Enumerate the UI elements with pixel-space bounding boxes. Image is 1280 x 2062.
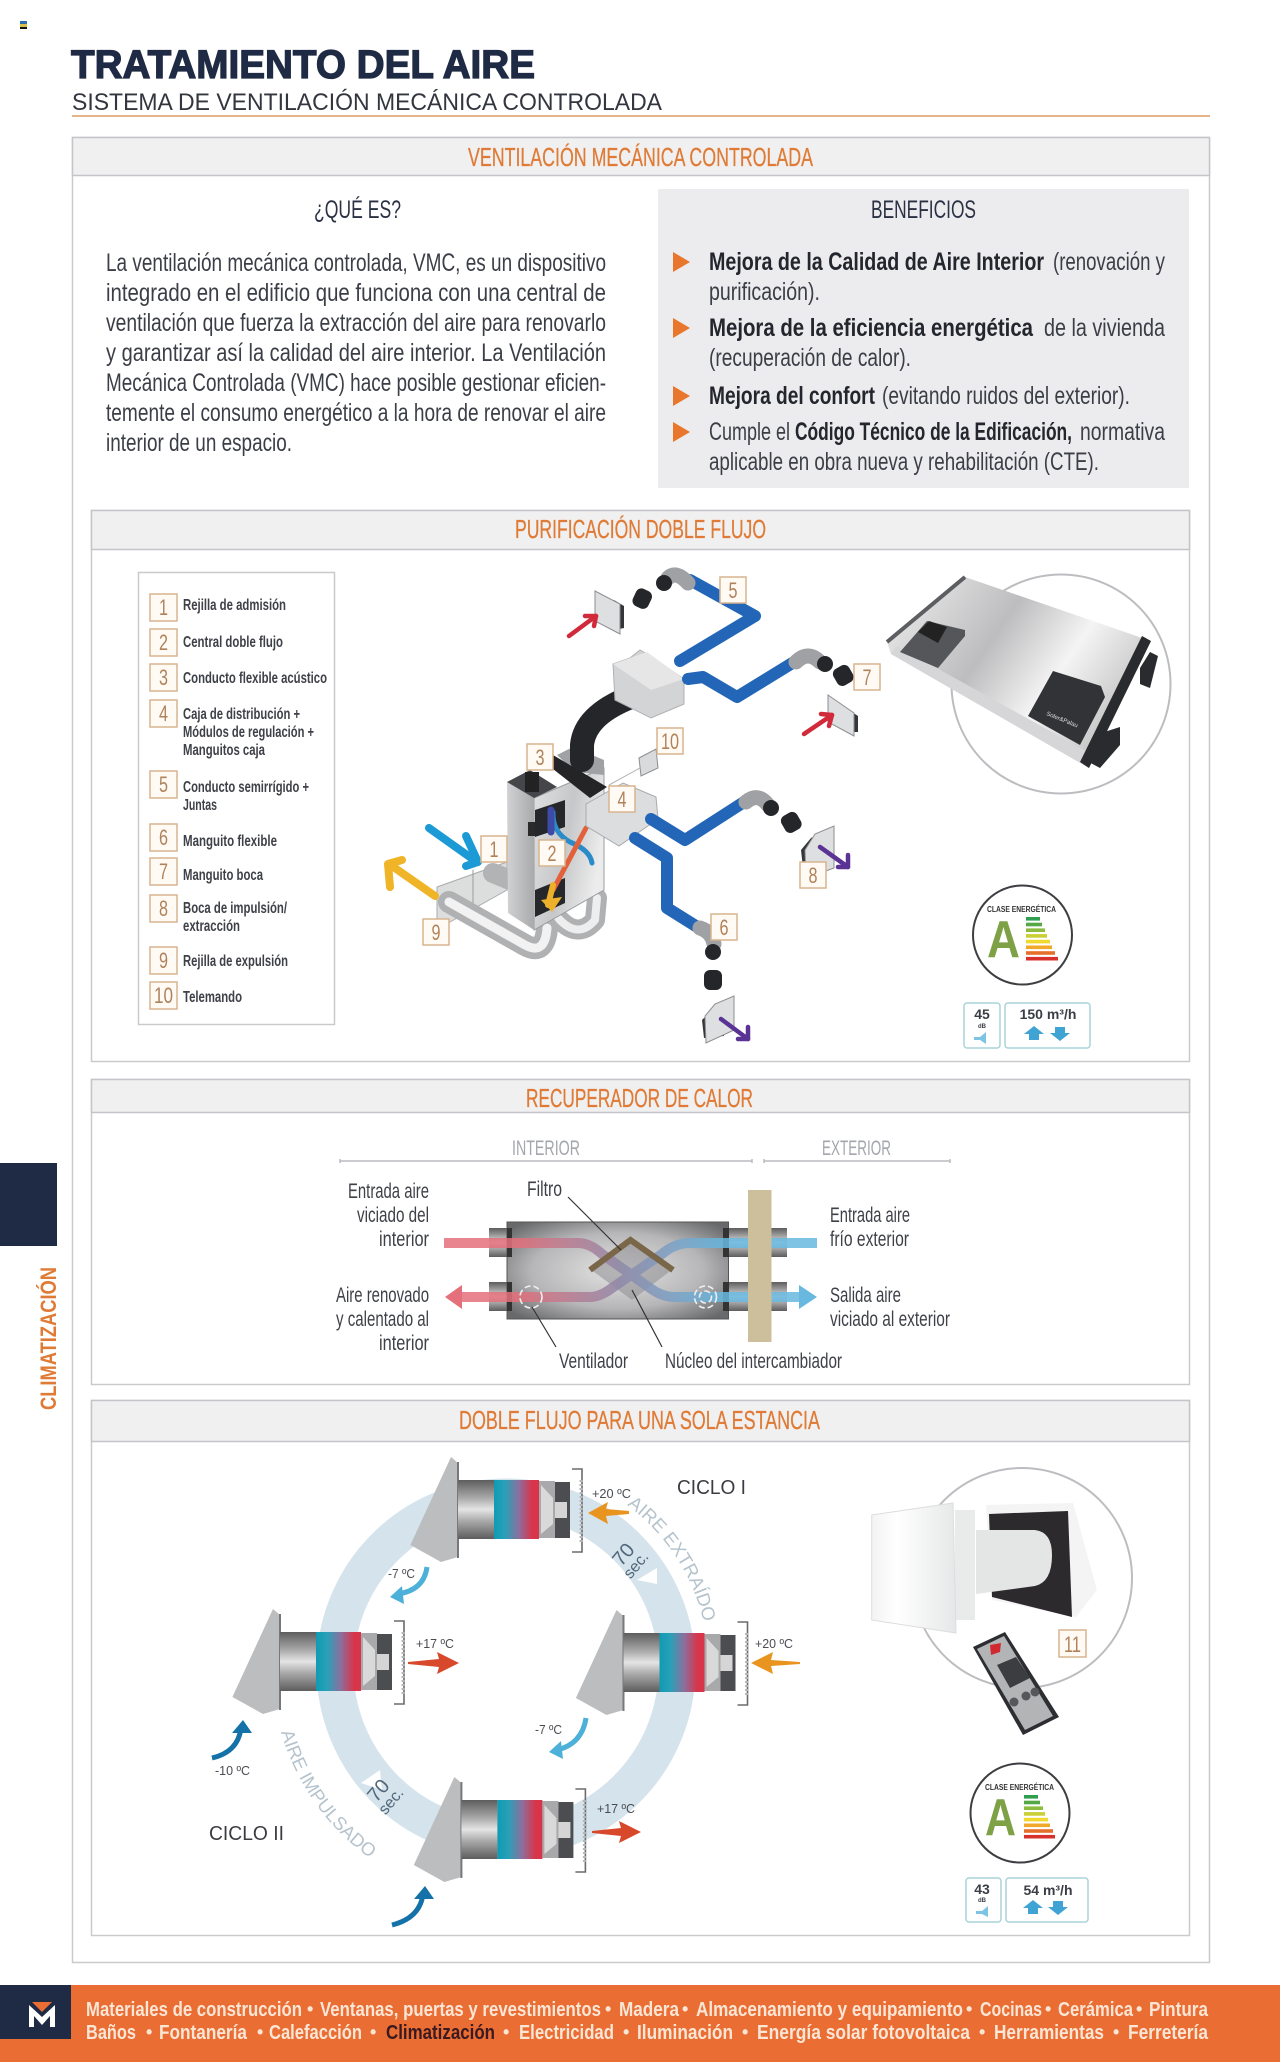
wall [748,1190,772,1342]
footer band [0,1985,1280,2062]
sidebar tab [0,1163,57,1246]
sidebar label: CLIMATIZACIÓN [36,1267,61,1410]
legend item 3: Conducto flexible acústico [183,670,327,687]
footer categories line 1: Madera [619,1999,680,2021]
legend item 2: Central doble flujo [183,634,283,651]
legend item 2 [150,629,283,656]
legend item 7: Manguito boca [183,867,263,884]
panel: beneficios: Mejora del confort [709,382,876,410]
silver exhaust pipes [437,862,597,948]
temperature labels: +20 ºC [592,1486,631,1501]
footer categories line 2: Energía solar fotovoltaica [757,2022,971,2044]
footer categories line 1: • [966,1999,972,2019]
legend item 6: 6 [159,825,168,850]
temperature labels: -7 ºC [535,1722,562,1737]
legend item 9: 9 [159,948,168,973]
marker 6: 6 [720,915,728,940]
label: entrada aire viciado: interior [379,1228,429,1251]
energy class badge: CLASE ENERGÉTICA [985,1783,1054,1792]
temperature labels: -10 ºC [215,1763,250,1778]
heat recovery diagram [336,1137,950,1373]
label: entrada aire viciado [348,1180,429,1251]
stat: noise 45 dB: 45 [974,1006,990,1022]
legend item 2: 2 [159,630,168,655]
marker 6 [711,914,737,940]
air arrows [388,616,848,1039]
legend item 8 [150,895,287,935]
black flexible duct [582,697,631,760]
internal airflow in central unit [548,810,592,905]
footer logo [0,1985,71,2039]
footer categories line 2: • [623,2022,629,2042]
footer categories line 2: • [146,2022,152,2042]
marker 8 [800,862,826,888]
legend item 6: Manguito flexible [183,833,277,850]
legend item 1: 1 [159,595,168,620]
energy class badge: CLASE ENERGÉTICA [987,905,1056,914]
stat: noise 43 dB: 43 [974,1881,990,1897]
label: aire renovado [336,1284,429,1355]
zone label: exterior: EXTERIOR [822,1137,891,1160]
stat: noise 43 dB [966,1878,1001,1922]
legend item 9: Rejilla de expulsión [183,953,288,970]
marker 3 [527,744,553,770]
text block: definition: y garantizar así la calidad del aire interior. La Ventilación [106,339,606,367]
footer categories line 2: Iluminación [637,2022,733,2044]
label: salida aire viciado: Salida aire [830,1284,901,1307]
text block: definition: interior de un espacio. [106,429,292,457]
legend item 4 [150,700,314,759]
footer categories line 2: • [503,2022,509,2042]
footer categories line 2: Electricidad [519,2022,614,2044]
label: aire renovado: Aire renovado [336,1284,429,1307]
marker 10: 10 [661,729,679,754]
panel: beneficios [658,189,1189,488]
temperature labels: +17 ºC [597,1801,635,1816]
panel: beneficios: (evitando ruidos del exterior). [882,382,1130,410]
footer categories line 2: • [1113,2022,1119,2042]
legend item 7: 7 [159,859,168,884]
legend item 5: Juntas [183,797,217,814]
cycle diagram [209,1457,800,1928]
energy class badge: A [985,1789,1016,1847]
footer categories line 1: Cerámica [1058,1999,1134,2021]
panel: beneficios: de la vivienda [1044,314,1165,342]
legend item 6 [150,824,277,851]
label: ciclo I: CICLO I [677,1477,746,1499]
footer categories line 1: Cocinas [980,1999,1042,2021]
arrow: warm out bottom [592,1821,641,1843]
callout: single room unit product [872,1468,1132,1735]
legend item 8: Boca de impulsión/ [183,900,287,917]
arrow: warm out left [408,1652,459,1674]
footer categories line 2: Fontanería [159,2022,248,2044]
print colour marker [20,21,27,29]
legend item 5: 5 [159,772,168,797]
label: entrada aire frío: Entrada aire [830,1204,910,1227]
marker 3: 3 [536,745,544,770]
remote control [973,1632,1059,1735]
footer categories line 2: Baños [86,2022,136,2044]
text block: definition: integrado en el edificio que funciona con una central de [106,279,606,307]
stat: noise 45 dB [964,1003,1000,1048]
legend item 10: 10 [154,983,173,1008]
guide path: aire impulsado [281,1732,436,1891]
marker 8: 8 [808,863,818,888]
fans [520,1286,716,1308]
legend item 3: 3 [159,665,168,690]
label: filtro: Filtro [527,1178,562,1201]
guide path: aire extraído [627,1505,709,1668]
marker 1: 1 [490,837,498,862]
marker 9 [423,919,449,945]
footer categories line 2: • [742,2022,748,2042]
callout numbers on the diagram [423,577,880,945]
panel heading: PURIFICACIÓN DOBLE FLUJO [515,514,766,544]
ring direction arrows [637,1568,657,1584]
stat: flow 54 m3/h [1006,1878,1088,1922]
footer categories line 1: Pintura [1149,1999,1209,2021]
callout: central unit product: Soler&Palau [1045,711,1078,729]
footer categories line 1: • [1136,1999,1142,2019]
arrow: cold in left [212,1720,252,1758]
title: TRATAMIENTO DEL AIRE [71,43,535,87]
legend item 4: Módulos de regulación + [183,724,314,741]
panel: beneficios: purificación). [709,278,820,306]
marker 5 [720,577,746,603]
duct elbows and fittings [668,575,820,944]
central unit body [534,768,604,930]
filter [590,1240,673,1270]
label: aire renovado: y calentado al [336,1308,429,1331]
arrow: warm in right [751,1652,800,1674]
footer categories line 2 [86,2022,1209,2044]
marker 1 [481,836,507,862]
panel: beneficios: Mejora de la Calidad de Aire Interior [709,248,1044,276]
arrow: cold in bottom [392,1886,434,1925]
text block: definition: La ventilación mecánica controlada, VMC, es un dispositivo [106,249,606,277]
marker 9: 9 [432,920,440,945]
label: salida aire viciado [830,1284,950,1331]
panel: recuperador de calor [92,1080,1190,1384]
legend item 5 [150,771,309,814]
legend item 1 [150,594,286,621]
footer categories line 1: Almacenamiento y equipamiento [696,1999,963,2021]
panel: beneficios: Mejora de la eficiencia energética [709,314,1034,342]
panel: purificación doble flujo [92,510,1190,1062]
marker 2 [539,840,565,866]
temperature labels: -7 ºC [388,1566,415,1581]
footer categories line 1: Ventanas, puertas y revestimientos [320,1999,601,2021]
label: ciclo II: CICLO II [209,1823,284,1845]
panel: beneficios: Cumple el [709,418,790,446]
marker 4: 4 [618,787,626,812]
label: 70 sec top [606,1537,652,1582]
panel: beneficios: Código Técnico de la Edificación, [795,418,1072,446]
label: salida aire viciado: viciado al exterior [830,1308,950,1331]
label: 70 sec top: sec. [621,1549,652,1582]
legend [138,572,334,1024]
heading: beneficios: BENEFICIOS [871,196,976,224]
footer categories line 2: Calefacción [269,2022,362,2044]
zone label: interior: INTERIOR [512,1137,580,1160]
footer categories line 2: • [979,2022,985,2042]
leader lines [532,1197,662,1347]
exchanger body [507,1222,728,1319]
unit: top [410,1457,582,1562]
label: aire extraído: AIRE EXTRAÍDO [627,1498,715,1620]
stat: flow 54 m3/h: 54 m³/h [1023,1882,1073,1898]
label: 70 sec top: 70 [608,1539,639,1570]
panel: beneficios: normativa [1080,418,1165,446]
marker 2: 2 [548,841,556,866]
temperature labels: +17 ºC [416,1636,454,1651]
unit: left [232,1609,404,1714]
stat: flow 150 m3/h: 150 m³/h [1020,1006,1076,1022]
panel heading: DOBLE FLUJO PARA UNA SOLA ESTANCIA [459,1405,820,1435]
text block: definition: temente el consumo energético a la hora de renovar el aire [106,399,606,427]
marker 11: 11 [1064,1632,1081,1657]
temperature labels: +20 ºC [755,1636,793,1651]
stat: noise 45 dB: dB [978,1024,987,1030]
stat: noise 43 dB: dB [978,1898,987,1904]
text block: definition: ventilación que fuerza la extracción del aire para renovarlo [106,309,606,337]
footer categories line 1: • [682,1999,688,2019]
text block: definition [106,249,606,457]
legend item 9 [150,947,288,974]
marker 7: 7 [862,665,872,690]
energy class badge [970,1764,1070,1862]
panel: ventilación mecánica controlada [72,138,1210,1962]
stat: flow 150 m3/h [1005,1003,1090,1048]
footer categories line 1 [86,1999,1209,2021]
label: 70 sec bottom: 70 [363,1775,394,1806]
label: 70 sec bottom: sec. [376,1785,407,1818]
footer categories line 1: • [605,1999,611,2019]
legend item 10: Telemando [183,989,242,1006]
grilles [614,600,858,1038]
air streams [444,1243,817,1297]
unit: bottom [414,1777,585,1882]
energy class badge: A [987,911,1020,969]
footer categories line 1: • [307,1999,313,2019]
marker 5: 5 [728,578,738,603]
legend item 4: 4 [159,701,168,726]
marker 4 [609,786,635,812]
panel: doble flujo para una sola estancia [92,1400,1190,1936]
label: entrada aire frío: frío exterior [830,1228,909,1251]
unit: right [576,1610,748,1715]
arrow: cold out right [549,1718,586,1759]
exchanger core [590,1240,673,1300]
heading: qué es: ¿QUÉ ES? [314,195,401,224]
footer categories line 1: Materiales de construcción [86,1999,302,2021]
legend item 7 [150,858,263,885]
panel: beneficios: (recuperación de calor). [709,344,911,372]
label: 70 sec bottom [361,1773,407,1818]
lower distribution box [586,783,658,846]
subtitle: SISTEMA DE VENTILACIÓN MECÁNICA CONTROLADA [72,89,662,116]
panel heading: VENTILACIÓN MECÁNICA CONTROLADA [468,142,813,172]
label: aire renovado: interior [379,1332,429,1355]
footer categories line 1: • [1045,1999,1051,2019]
text block: definition: Mecánica Controlada (VMC) hace posible gestionar eficien- [106,369,606,397]
label: entrada aire viciado: viciado del [357,1204,429,1227]
panel: beneficios: aplicable en obra nueva y rehabilitación (CTE). [709,448,1099,476]
label: ventilador: Ventilador [559,1350,628,1373]
legend item 5: Conducto semirrígido + [183,779,309,796]
energy class badge [973,886,1072,984]
panel: beneficios: (renovación y [1053,248,1165,276]
callout: central unit product [887,574,1170,794]
marker 7 [854,664,880,690]
label: entrada aire frío [830,1204,910,1251]
duct stubs [489,1228,787,1311]
panel heading: RECUPERADOR DE CALOR [526,1083,753,1113]
footer categories line 2: • [257,2022,263,2042]
arrow: warm in top [588,1502,629,1524]
legend item 8: 8 [159,896,168,921]
legend item 8: extracción [183,918,240,935]
upper distribution box [613,650,684,718]
blue ducts [635,580,794,928]
legend item 4: Caja de distribución + [183,706,300,723]
label: entrada aire viciado: Entrada aire [348,1180,429,1203]
footer categories line 2: Ferretería [1128,2022,1209,2044]
label: aire impulsado: AIRE IMPULSADO [281,1732,375,1856]
remote control small [639,749,658,776]
arrow: cold out top [390,1567,427,1604]
legend item 10 [150,982,242,1009]
legend item 3 [150,664,327,691]
footer categories line 2: • [370,2022,376,2042]
label: núcleo: Núcleo del intercambiador [665,1350,842,1373]
air cycle ring [335,1497,677,1839]
footer categories line 2: Herramientas [994,2022,1104,2044]
legend item 4: Manguitos caja [183,742,265,759]
legend item 1: Rejilla de admisión [183,597,286,614]
footer categories line 2: Climatización [386,2022,495,2044]
temperature labels [215,1486,793,1816]
diagram: ducting system [388,575,858,1043]
